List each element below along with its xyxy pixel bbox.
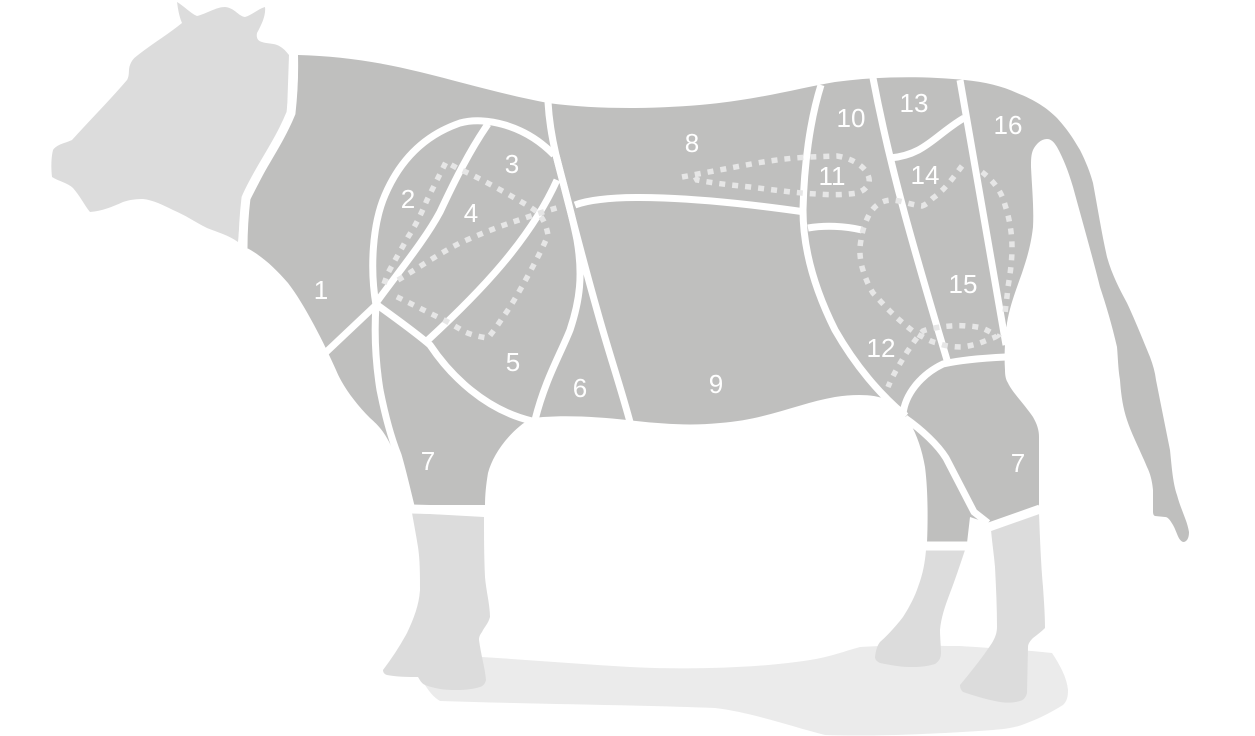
lower leg: front (383, 513, 490, 690)
label 1: 1 (314, 275, 328, 305)
label 2: 2 (401, 184, 415, 214)
label 12: 12 (867, 333, 895, 363)
label 3: 3 (505, 149, 519, 179)
cut numbers (314, 88, 1025, 478)
ground shadow (425, 646, 1068, 736)
lower leg: rear far (960, 513, 1045, 703)
label 16: 16 (994, 110, 1022, 140)
dotted inner cut lines (384, 156, 1012, 387)
label 5: 5 (506, 347, 520, 377)
label 10: 10 (837, 103, 865, 133)
label 13: 13 (900, 88, 928, 118)
cut boundaries (322, 78, 1006, 523)
label 9: 9 (709, 369, 723, 399)
neck and leg boundaries (243, 55, 1040, 546)
head (51, 2, 289, 242)
label 15: 15 (949, 269, 977, 299)
lower leg: rear near (875, 550, 965, 667)
label 8: 8 (685, 128, 699, 158)
label 14: 14 (911, 160, 939, 190)
label 7 front: 7 (421, 446, 435, 476)
label 6: 6 (573, 373, 587, 403)
label 11: 11 (818, 161, 846, 191)
label 4: 4 (464, 198, 478, 228)
body (247, 55, 1189, 543)
label 7 rear: 7 (1011, 448, 1025, 478)
